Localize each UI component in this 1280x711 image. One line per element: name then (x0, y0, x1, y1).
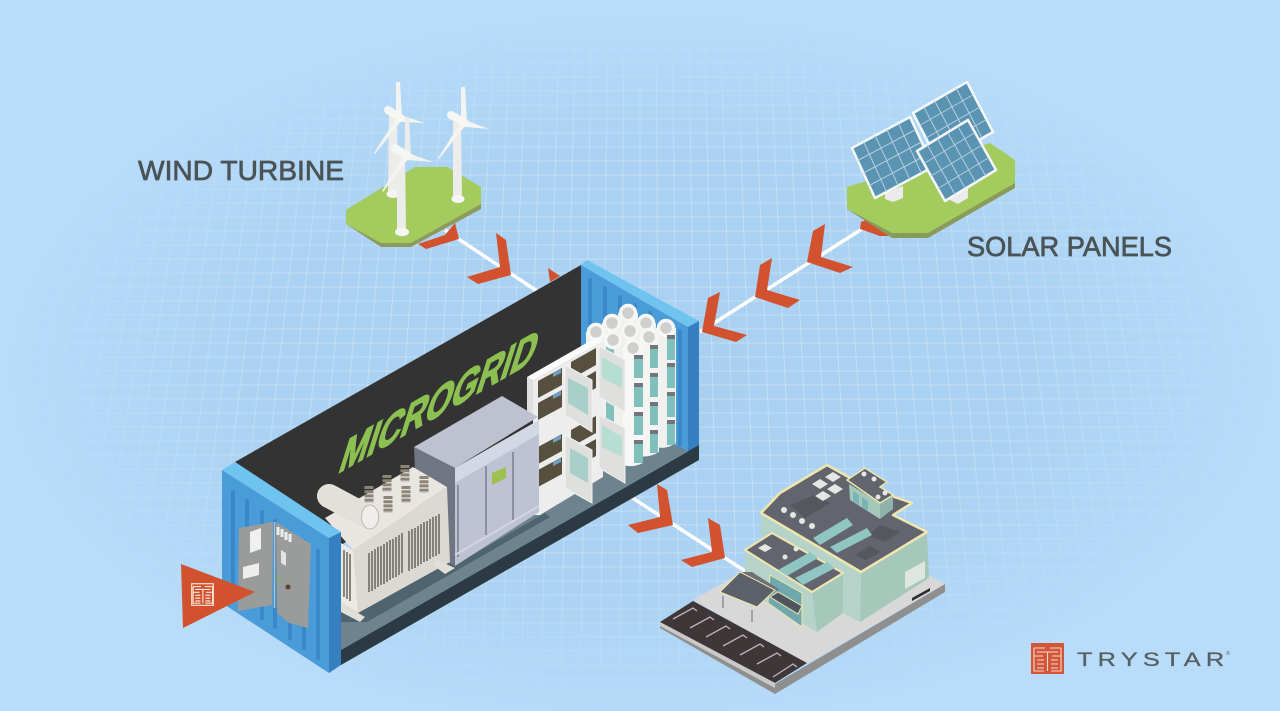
battery rack (527, 337, 625, 515)
solar panel island (847, 82, 1015, 238)
base side (660, 584, 945, 694)
battery door: upper left (565, 365, 592, 432)
control screen (492, 467, 506, 485)
entrance awning (770, 592, 802, 614)
front cylinder columns (623, 320, 676, 466)
rooftop vents (781, 472, 843, 529)
arrow: solar panels to microgrid (700, 215, 900, 342)
solar panel: front (917, 120, 996, 201)
arrow: microgrid to building (628, 484, 745, 571)
green platform (346, 167, 481, 247)
heading: wind turbine: WIND TURBINE (138, 155, 344, 186)
electrical panel door (238, 522, 311, 628)
trystar logo (1031, 643, 1230, 674)
back cylinders (586, 313, 656, 451)
heading: solar panels: SOLAR PANELS (967, 231, 1172, 262)
container near end wall (222, 462, 341, 673)
battery door: lower left (565, 435, 592, 503)
turbine: back left (374, 82, 425, 198)
arrow: wind turbine to microgrid (418, 223, 560, 293)
radiators (344, 514, 439, 601)
service door (905, 561, 925, 589)
transformer (325, 465, 455, 622)
trystar marker triangle (181, 564, 255, 628)
solar panel: left (852, 117, 933, 198)
skylights (813, 518, 872, 553)
conservator tank (329, 496, 378, 529)
parking lot (660, 601, 807, 688)
loading dock strip (912, 588, 930, 601)
solar panel: back (913, 82, 993, 163)
turbine: right (438, 87, 489, 203)
battery modules (538, 348, 596, 487)
entrance canopy (720, 572, 780, 622)
main wall: left face (761, 513, 861, 622)
lower block roof (745, 533, 843, 592)
logo mark (1031, 643, 1064, 674)
microgrid container (222, 260, 699, 673)
back cylinder teal strips (606, 345, 614, 445)
logo mark (192, 584, 213, 605)
entrance glazing (768, 575, 802, 627)
main roof (761, 465, 927, 572)
building (660, 465, 945, 694)
sidewalk (693, 560, 945, 664)
panel stand: left (885, 186, 903, 202)
panel stand: right (950, 188, 968, 204)
registered mark: ® (1226, 650, 1230, 657)
module indicators (553, 369, 561, 466)
main wall: right face (860, 534, 929, 622)
lower block walls (812, 575, 843, 632)
inverter cabinet (414, 396, 539, 566)
battery door: upper right (599, 346, 625, 412)
container back wall (235, 265, 581, 545)
battery cylinders (586, 306, 676, 466)
container far end wall (581, 260, 699, 452)
penthouse (847, 468, 893, 519)
container floor (341, 400, 699, 665)
label: microgrid: MICROGRID (333, 318, 546, 485)
wind turbine island (346, 82, 489, 247)
bushings (369, 465, 424, 513)
green platform (847, 143, 1015, 238)
turbine: front (382, 118, 433, 236)
wordmark: TRYSTAR (1077, 649, 1229, 670)
battery door: lower right (599, 415, 625, 483)
